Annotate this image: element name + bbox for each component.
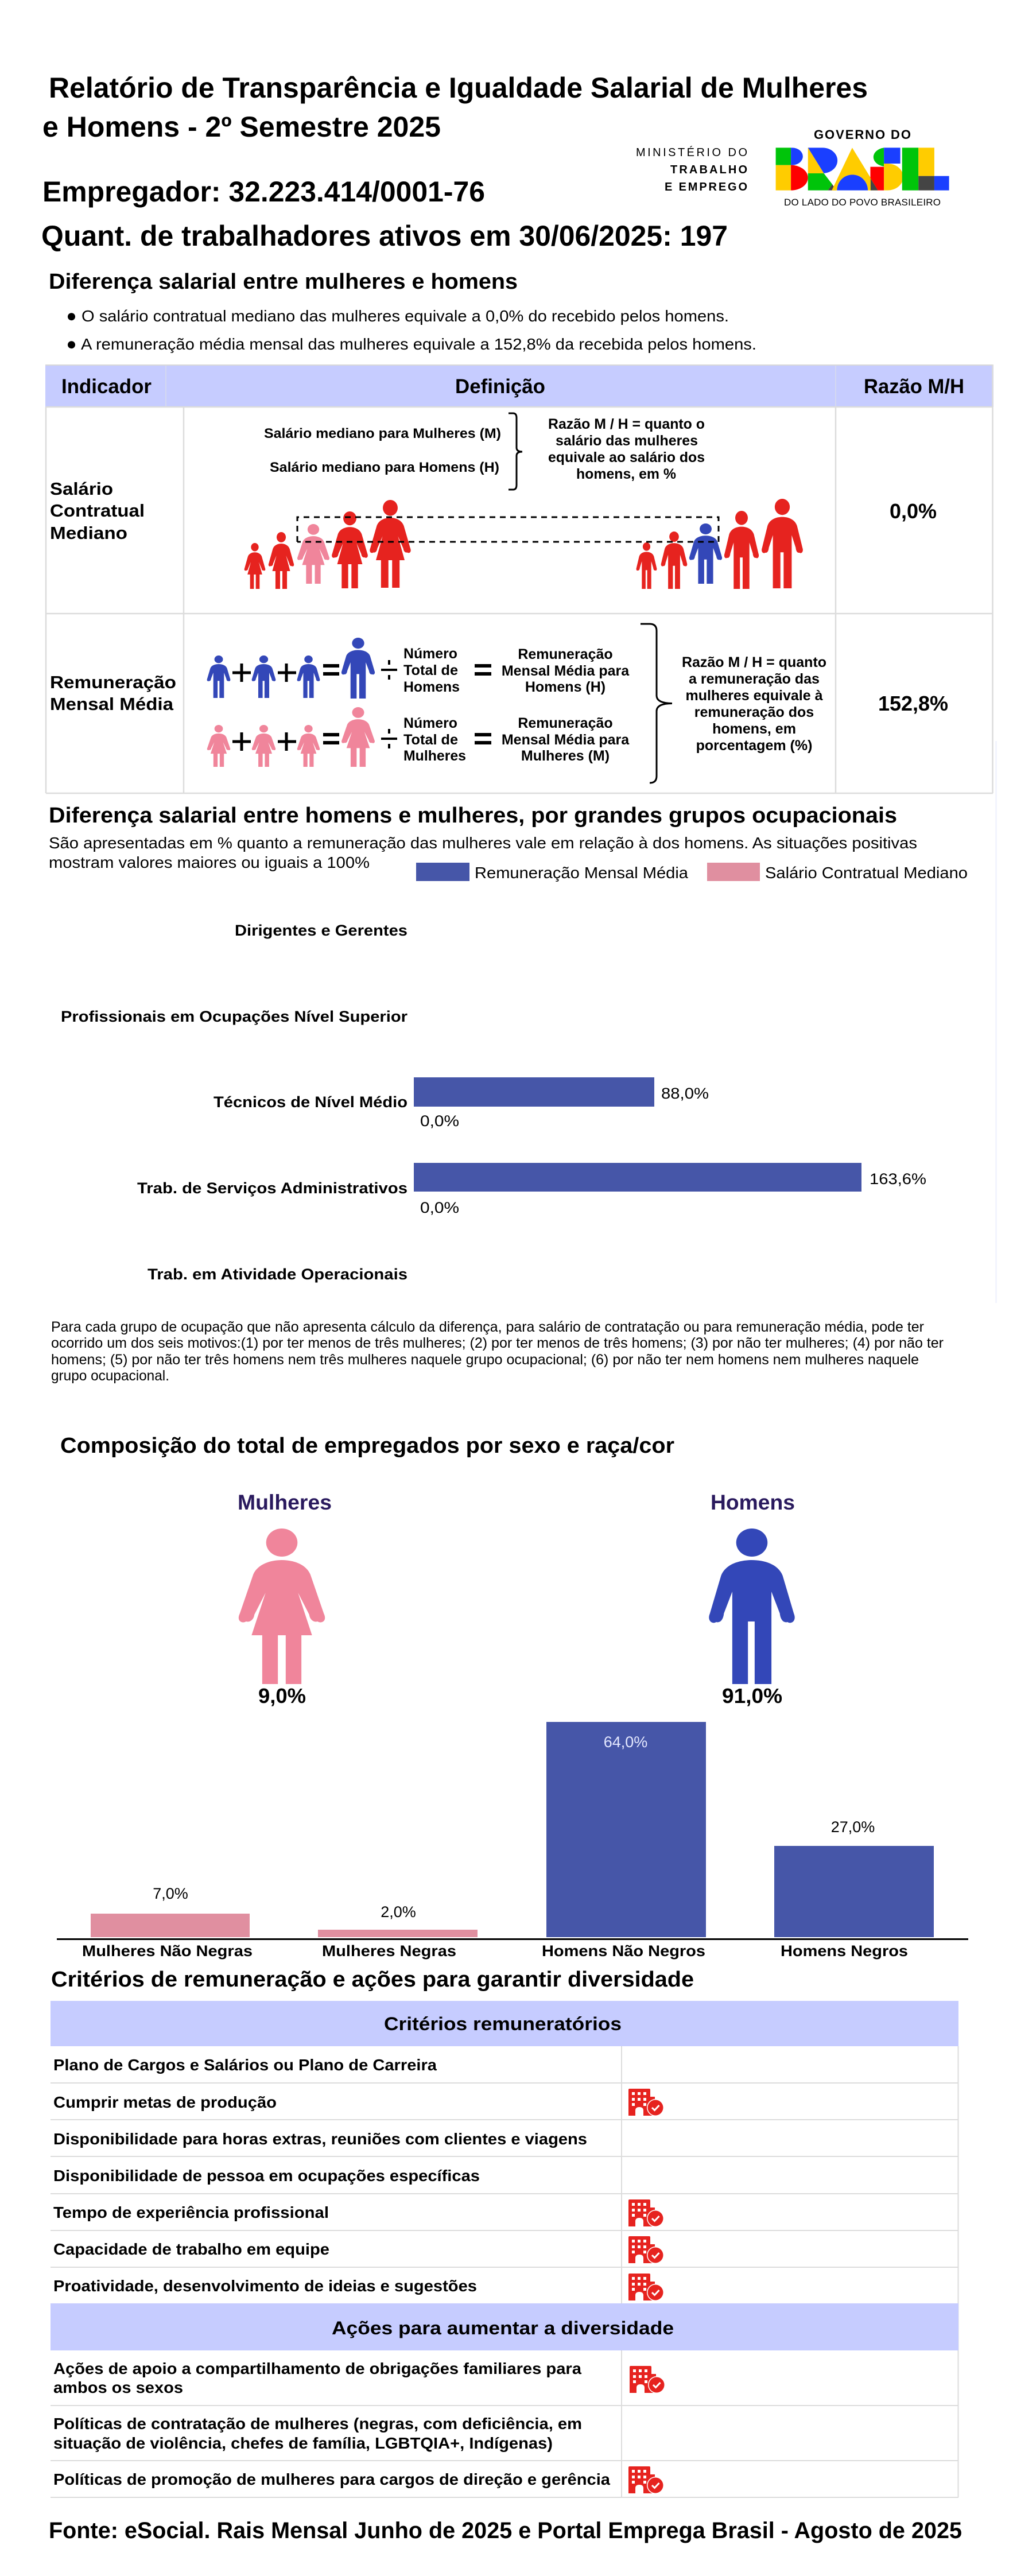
- men equation: [207, 638, 491, 699]
- men share: [709, 1491, 795, 1708]
- bullets: O salário contratual mediano das mulheres equivale a 0,0% do recebido pelos homens.: [81, 307, 729, 325]
- footnote: Para cada grupo de ocupação que não apresenta cálculo da diferença, para salário de contratação ou para remuneração média, pode ter: [51, 1319, 924, 1335]
- ratio definition: homens, em %: [576, 466, 676, 482]
- legend: [416, 863, 968, 882]
- value labels: 0,0%: [420, 1199, 459, 1216]
- action rows: [53, 2360, 610, 2488]
- explanatory text: mostram valores maiores ou iguais a 100%: [49, 854, 370, 871]
- row: mean monthly pay: Mensal Média: [50, 694, 174, 714]
- ratio definition: Razão M / H = quanto o: [548, 416, 705, 432]
- logo: Governo do Brasil: [776, 127, 949, 208]
- header: diversity actions: [51, 2303, 958, 2350]
- bar chart: sex and race: [57, 1722, 968, 1960]
- ratio definition: a remuneração das: [689, 671, 820, 687]
- bullets: [68, 307, 756, 353]
- equation labels: Mulheres: [403, 748, 466, 764]
- row: mean monthly pay: Remuneração: [50, 672, 176, 692]
- ratio definition: [682, 654, 826, 754]
- value labels: 163,6%: [870, 1170, 926, 1188]
- value labels: 64,0%: [604, 1733, 647, 1751]
- panel: criteria table: [51, 2001, 958, 2497]
- category labels: Dirigentes e Gerentes: [235, 922, 407, 939]
- row: contractual median: [50, 413, 937, 589]
- men share: 91,0%: [722, 1684, 782, 1708]
- action rows: Políticas de contratação de mulheres (negras, com deficiência, em: [53, 2415, 582, 2433]
- legend: Remuneração Mensal Média: [475, 864, 688, 882]
- action rows: ambos os sexos: [53, 2379, 183, 2396]
- equation labels: Homens (H): [525, 679, 606, 695]
- ratio definition: [548, 416, 705, 482]
- equation labels: Mensal Média para: [502, 663, 630, 679]
- value: 0,0%: [890, 499, 937, 523]
- category labels: Trab. de Serviços Administrativos: [137, 1180, 407, 1197]
- women share: [238, 1491, 332, 1708]
- action rows: Políticas de promoção de mulheres para cargos de direção e gerência: [53, 2470, 610, 2488]
- criteria rows: Plano de Cargos e Salários ou Plano de Carreira: [53, 2056, 437, 2074]
- icons: women by height: [244, 500, 411, 589]
- row: contractual median: Mediano: [50, 523, 127, 543]
- active workers: Quant. de trabalhadores ativos em 30/06/2025: 197: [41, 220, 728, 252]
- women equation: [207, 707, 491, 767]
- header: diversity actions: Ações para aumentar a diversidade: [332, 2318, 674, 2338]
- equation labels: Homens: [403, 679, 460, 695]
- ratio definition: porcentagem (%): [696, 738, 812, 754]
- equation labels: Mulheres (M): [521, 748, 610, 764]
- heading: composition: Composição do total de empregados por sexo e raça/cor: [60, 1434, 674, 1458]
- women share: Mulheres: [238, 1491, 332, 1514]
- header: pay criteria: Critérios remuneratórios: [384, 2014, 622, 2034]
- footnote: grupo ocupacional.: [51, 1368, 169, 1384]
- brace: [509, 413, 522, 490]
- equation labels: [403, 646, 630, 764]
- equation labels: Total de: [403, 662, 458, 678]
- criteria rows: Tempo de experiência profissional: [53, 2203, 329, 2221]
- logo: Ministério do Trabalho e Emprego: E EMPREGO: [665, 181, 747, 193]
- equation labels: Remuneração: [518, 715, 613, 731]
- bullets: A remuneração média mensal das mulheres equivale a 152,8% da recebida pelos homens.: [81, 335, 756, 353]
- ratio definition: homens, em: [712, 721, 796, 737]
- table header: Indicador: [61, 375, 152, 398]
- equation labels: Total de: [403, 732, 458, 748]
- ratio definition: equivale ao salário dos: [548, 449, 705, 465]
- table header: [45, 364, 993, 407]
- median dashed box: [297, 517, 719, 542]
- value labels: 0,0%: [420, 1112, 459, 1130]
- header: pay criteria: [51, 2001, 958, 2046]
- legend: Salário Contratual Mediano: [765, 864, 968, 882]
- heading: wage gap: Diferença salarial entre mulheres e homens: [49, 270, 518, 294]
- logo: Ministério do Trabalho e Emprego: [636, 146, 747, 193]
- equation labels: Número: [403, 646, 457, 662]
- logo: Ministério do Trabalho e Emprego: MINISTÉRIO DO: [636, 146, 747, 159]
- logo: Governo do Brasil: GOVERNO DO: [814, 127, 911, 142]
- footnote: [51, 1319, 944, 1384]
- row: contractual median: Salário: [50, 479, 113, 499]
- explanatory text: São apresentadas em % quanto a remuneração das mulheres vale em relação à dos homens. As situações positivas: [49, 834, 917, 852]
- action rows: Ações de apoio a compartilhamento de obrigações familiares para: [53, 2360, 581, 2377]
- criteria rows: Cumprir metas de produção: [53, 2093, 277, 2111]
- category labels: [82, 1942, 908, 1960]
- criteria rows: [53, 2056, 587, 2295]
- employer: Empregador: 32.223.414/0001-76: [42, 176, 485, 208]
- women share: 9,0%: [258, 1684, 306, 1708]
- ratio definition: Razão M / H = quanto: [682, 654, 826, 670]
- icons: company check marks: [628, 2089, 665, 2494]
- action rows: situação de violência, chefes de família, LGBTQIA+, Indígenas): [53, 2434, 553, 2452]
- value labels: 27,0%: [831, 1818, 875, 1836]
- category labels: Trab. em Atividade Operacionais: [148, 1266, 407, 1283]
- men share: Homens: [711, 1491, 795, 1514]
- category labels: Mulheres Negras: [322, 1942, 456, 1960]
- value labels: 2,0%: [381, 1903, 416, 1921]
- logo: Ministério do Trabalho e Emprego: TRABALHO: [670, 164, 747, 176]
- row: mean monthly pay: [50, 624, 948, 783]
- table header: Definição: [455, 375, 545, 398]
- title: [42, 72, 868, 143]
- value labels: [420, 1085, 926, 1216]
- row: contractual median: Contratual: [50, 501, 145, 521]
- ratio definition: remuneração dos: [694, 704, 814, 720]
- footnote: homens; (5) por não ter três homens nem três mulheres naquele grupo ocupacional; (6) por não ter nem homens nem mulheres naquele: [51, 1352, 919, 1368]
- title: Relatório de Transparência e Igualdade Salarial de Mulheres: [49, 72, 868, 104]
- value: 152,8%: [878, 692, 948, 715]
- criteria rows: Capacidade de trabalho em equipe: [53, 2240, 329, 2258]
- equation labels: Mensal Média para: [502, 732, 630, 748]
- category labels: Homens Negros: [781, 1942, 908, 1960]
- source: Fonte: eSocial. Rais Mensal Junho de 2025 e Portal Emprega Brasil - Agosto de 2025: [49, 2518, 962, 2543]
- table header: Razão M/H: [864, 375, 964, 398]
- category labels: Profissionais em Ocupações Nível Superior: [61, 1008, 408, 1025]
- row: contractual median: Salário mediano para Mulheres (M): [264, 426, 501, 441]
- category labels: Técnicos de Nível Médio: [214, 1093, 407, 1111]
- category labels: [61, 922, 408, 1283]
- category labels: Mulheres Não Negras: [82, 1942, 253, 1960]
- bar chart: occupational groups: [61, 922, 926, 1283]
- category labels: Homens Não Negros: [542, 1942, 705, 1960]
- logo: Governo do Brasil: DO LADO DO POVO BRASILEIRO: [784, 197, 941, 208]
- panel: indicator table: [45, 364, 993, 793]
- icons: men by height: [636, 499, 803, 589]
- criteria rows: Disponibilidade de pessoa em ocupações específicas: [53, 2167, 480, 2185]
- bars: [414, 1077, 654, 1107]
- footnote: ocorrido um dos seis motivos:(1) por ter menos de três mulheres; (2) por ter menos de três homens; (3) por não ter mulheres; (4) por não ter: [51, 1335, 944, 1351]
- heading: criteria: Critérios de remuneração e ações para garantir diversidade: [51, 1968, 694, 1992]
- value labels: 7,0%: [153, 1885, 188, 1902]
- equation labels: Remuneração: [518, 646, 613, 662]
- criteria rows: Disponibilidade para horas extras, reuniões com clientes e viagens: [53, 2130, 587, 2148]
- heading: occupational groups: Diferença salarial entre homens e mulheres, por grandes grupos ocupacionais: [49, 804, 897, 828]
- value labels: 88,0%: [661, 1085, 709, 1102]
- explanatory text: [49, 834, 917, 871]
- ratio definition: mulheres equivale à: [685, 688, 823, 704]
- ratio definition: salário das mulheres: [556, 433, 698, 449]
- title: e Homens - 2º Semestre 2025: [42, 111, 441, 143]
- brace: [641, 624, 672, 783]
- equation labels: Número: [403, 715, 457, 731]
- value labels: [153, 1733, 875, 1921]
- row: contractual median: Salário mediano para Homens (H): [270, 460, 499, 475]
- criteria rows: Proatividade, desenvolvimento de ideias e sugestões: [53, 2277, 477, 2295]
